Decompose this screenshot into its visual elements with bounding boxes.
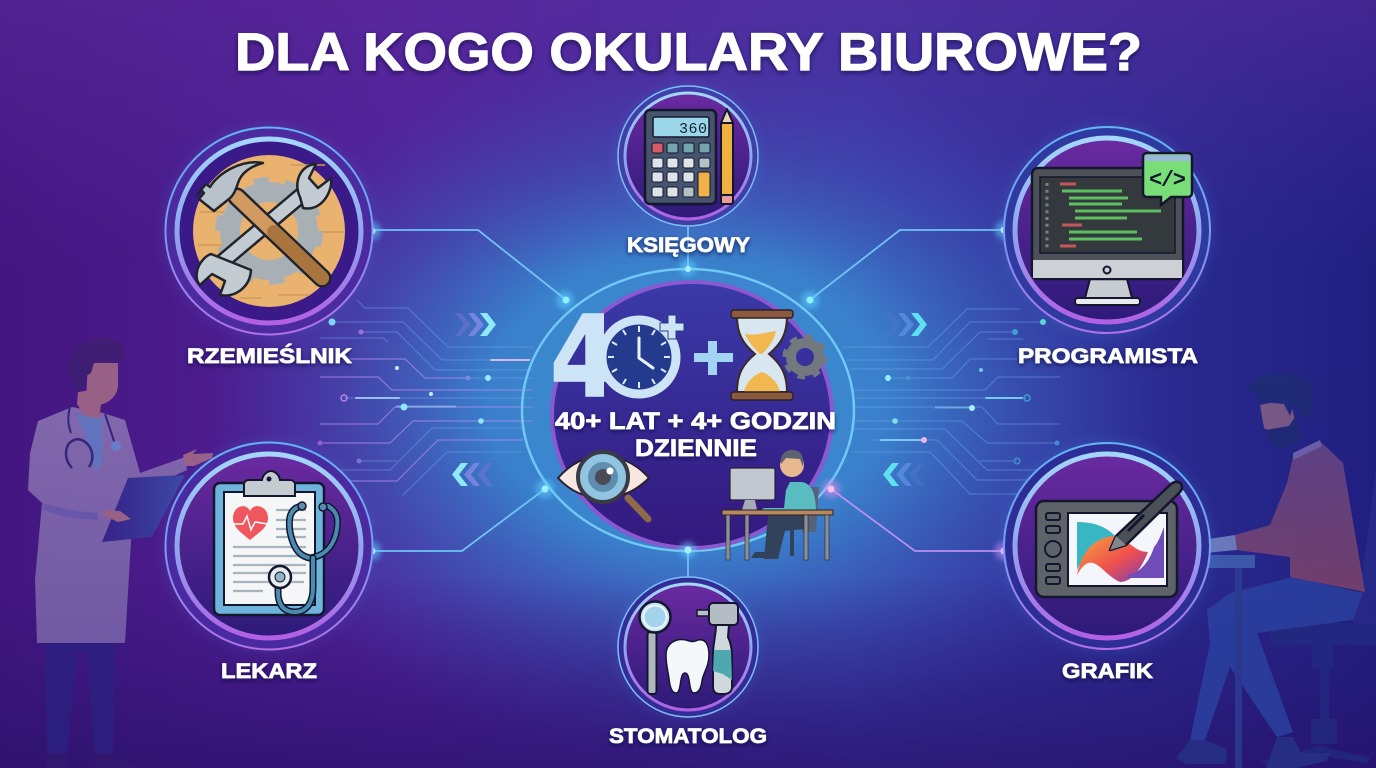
icon: tooth [666, 640, 709, 693]
icon: clipboard [214, 471, 337, 615]
icon: code bubble: </> [1149, 168, 1186, 193]
rings [618, 86, 758, 226]
icon: pencil [721, 109, 733, 204]
rings [1004, 443, 1210, 649]
icon: eye with magnifier [558, 452, 649, 519]
chevrons upper left [455, 313, 496, 336]
chevrons lower left [452, 463, 493, 486]
panel: programista [1004, 127, 1210, 333]
icon: hourglass [731, 310, 793, 400]
icon: gear [785, 337, 825, 377]
panel: grafik [1004, 443, 1210, 649]
label: księgowy: KSIĘGOWY [627, 234, 750, 257]
hub text: 40+ LAT + 4+ GODZIN [555, 408, 836, 435]
panel: centre hub [522, 269, 854, 560]
icon: code bubble [1143, 153, 1192, 205]
label: stomatolog: STOMATOLOG [609, 725, 767, 748]
connector lines [372, 227, 1004, 578]
icon: 40 plus clock: 4 [550, 293, 618, 423]
chevrons lower right [883, 463, 925, 486]
icon: stethoscope [269, 502, 337, 612]
hub text line two: DZIENNIE [635, 435, 757, 462]
label: lekarz: LEKARZ [221, 660, 317, 683]
icon: graphics tablet [1036, 482, 1182, 597]
icon: monitor [1032, 168, 1183, 305]
icon: tools [193, 155, 345, 307]
panel: lekarz [166, 442, 372, 650]
icon: dental drill [697, 603, 738, 694]
panel: stomatolog [618, 577, 758, 717]
panel: księgowy [618, 86, 758, 226]
circuit lines left [318, 300, 533, 495]
rings [166, 442, 372, 650]
connector nodes [363, 221, 1013, 560]
panel: rzemieślnik [166, 128, 372, 334]
title: DLA KOGO OKULARY BIUROWE? [235, 23, 1142, 82]
rings [618, 577, 758, 717]
icon: 40 plus clock [550, 293, 684, 423]
icon: calculator: 360 [679, 121, 707, 138]
label: grafik: GRAFIK [1062, 660, 1153, 683]
circuit lines right [843, 309, 1060, 494]
icon: stylus [1110, 482, 1182, 550]
icon: dental mirror [640, 602, 670, 694]
label: programista: PROGRAMISTA [1018, 345, 1198, 368]
label: rzemieślnik: RZEMIEŚLNIK [187, 344, 352, 368]
hub rings [522, 269, 854, 551]
designer silhouette [1176, 373, 1376, 768]
doctor silhouette [28, 338, 213, 768]
code lines [1060, 184, 1161, 246]
icon: person at desk [722, 450, 833, 560]
rings [1004, 127, 1210, 333]
rings [166, 128, 372, 334]
chevrons upper right [885, 313, 927, 336]
icon: plus [694, 341, 733, 375]
artwork [1077, 522, 1164, 582]
